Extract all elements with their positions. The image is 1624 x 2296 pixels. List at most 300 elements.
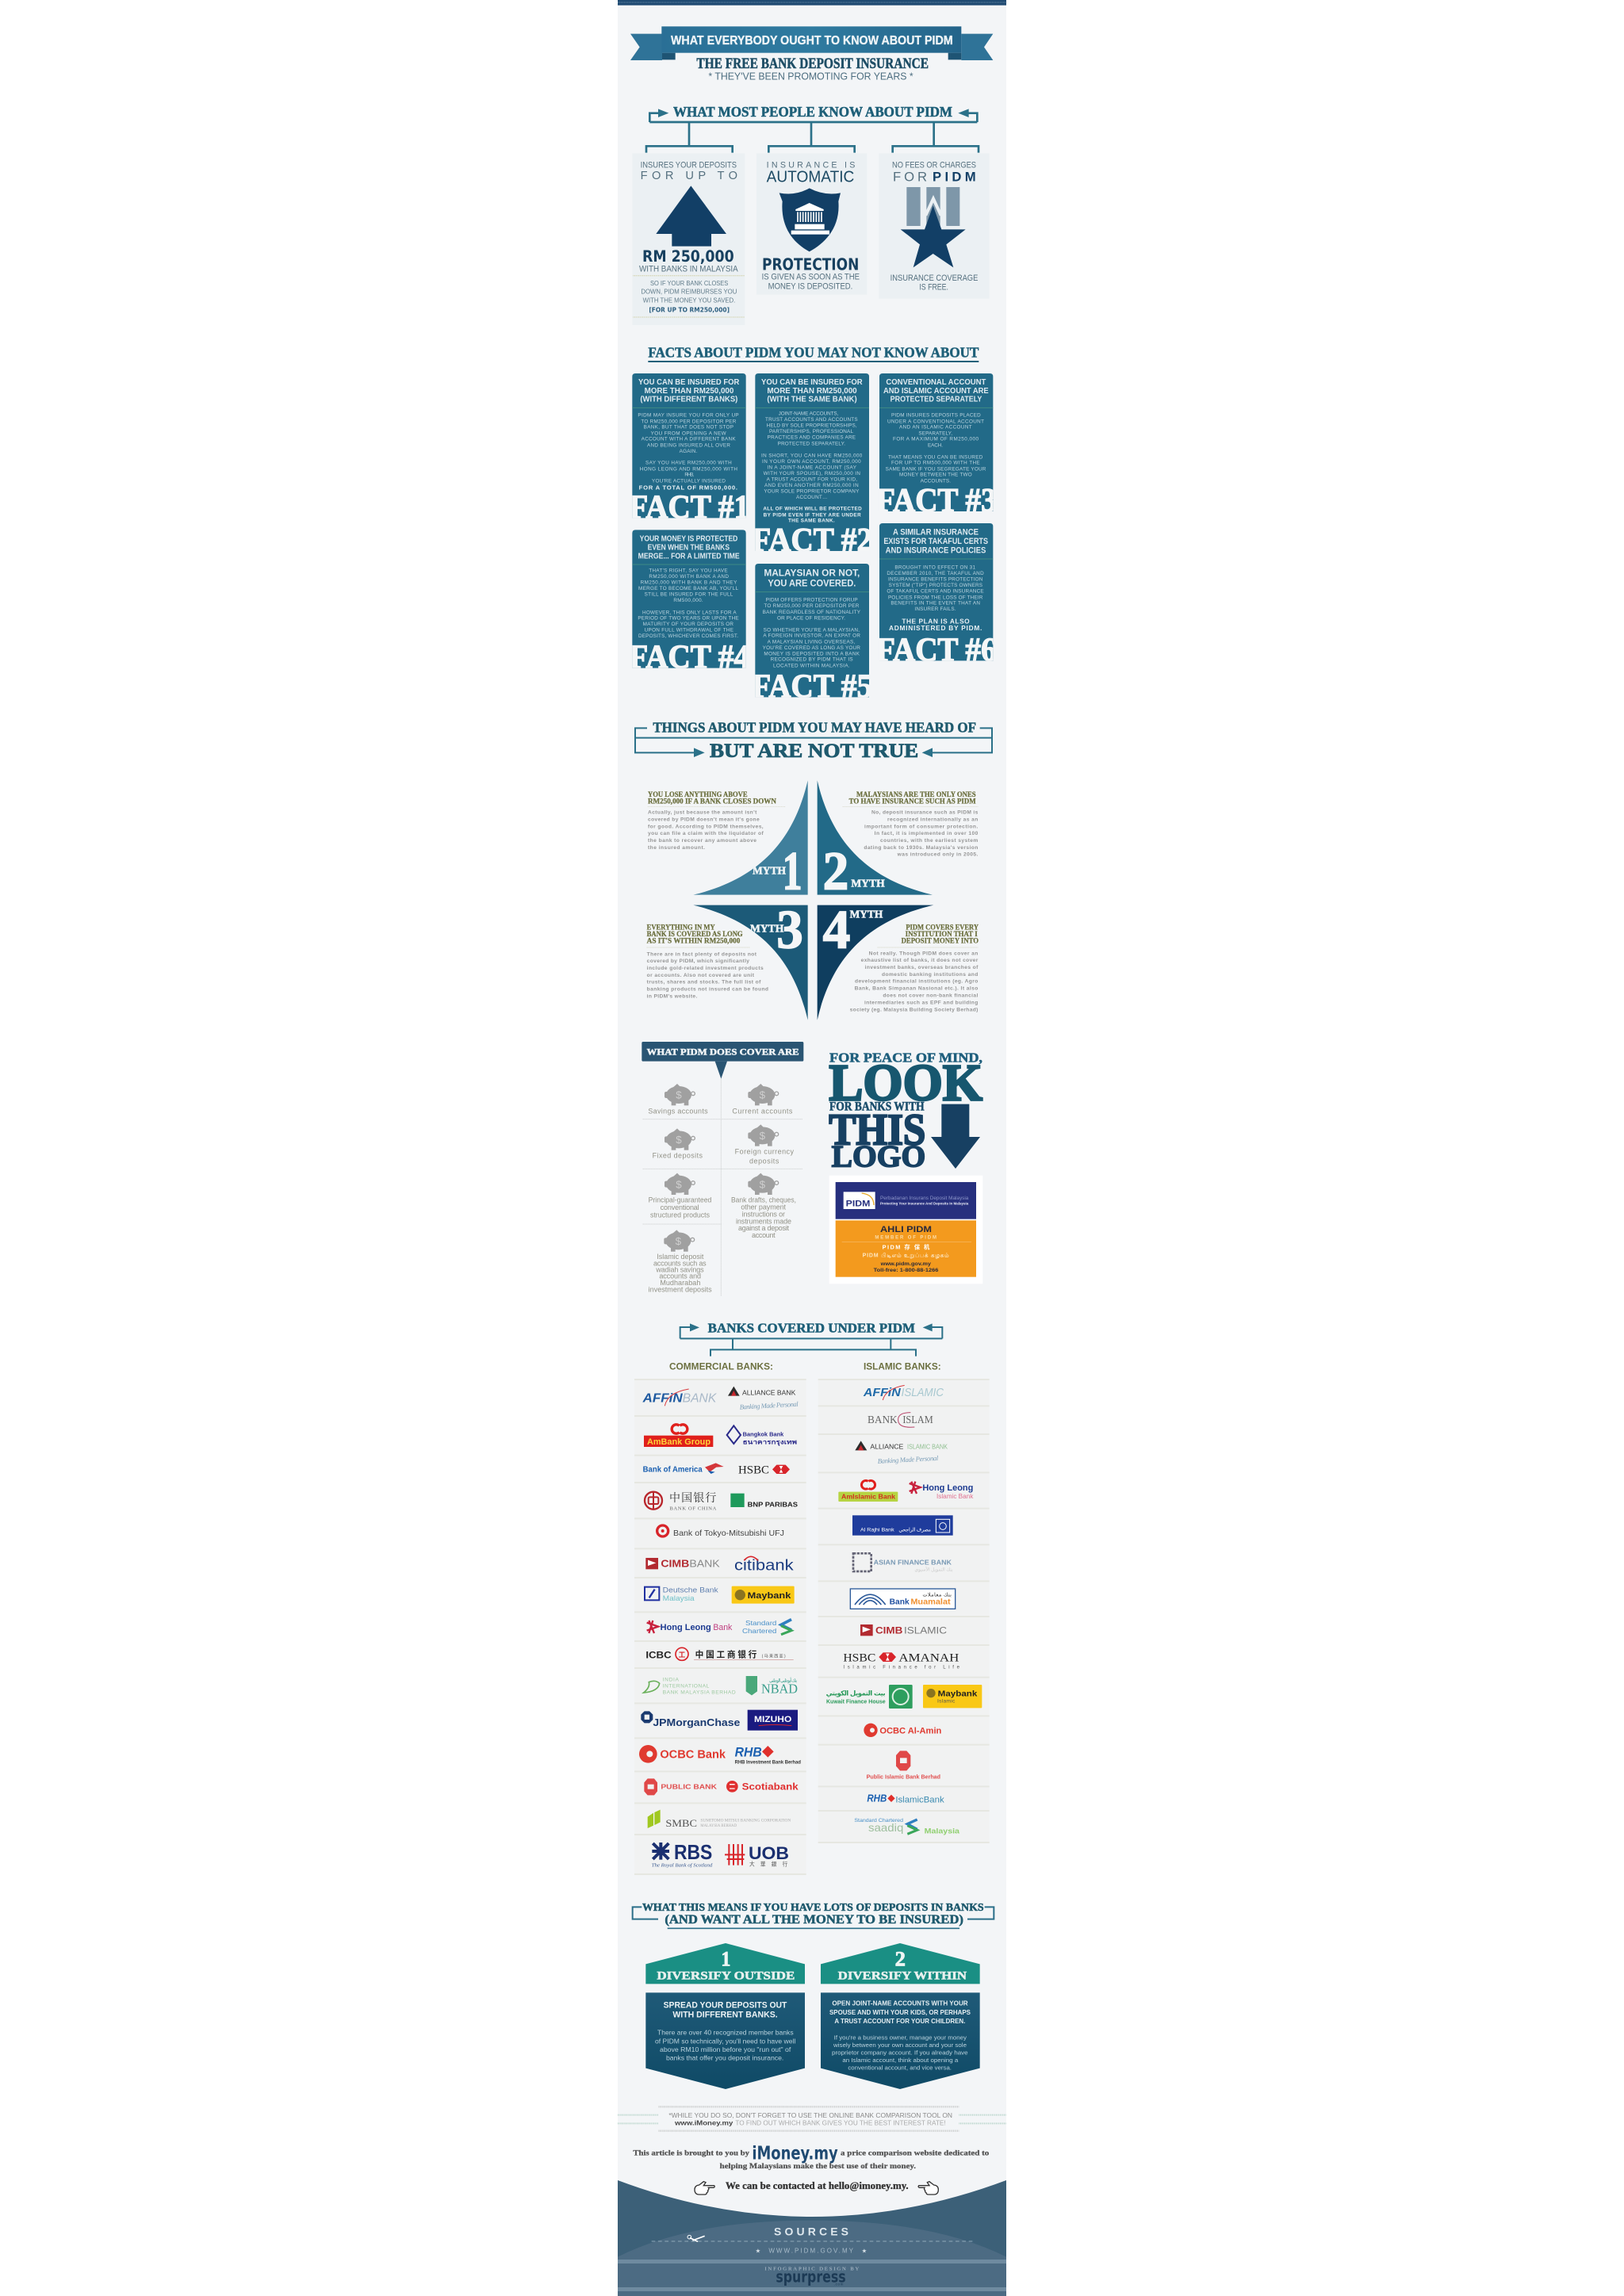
card: fact 6: BENEFITS IN THE EVENT THAT AN (891, 601, 980, 607)
card: fact 6: BROUGHT INTO EFFECT ON 31 (894, 564, 975, 570)
card: fact 5: A FOREIGN INVESTOR, AN EXPAT OR (763, 633, 860, 639)
coverage labels: account (752, 1231, 776, 1239)
sources: ★ (862, 2247, 868, 2254)
card: fact 6: EXISTS FOR TAKAFUL CERTS (883, 537, 988, 546)
design credit: spurpress (776, 2267, 846, 2286)
logo: Al Rajhi Bank: مصرف الراجحي (898, 1528, 931, 1533)
card: fact 3: UNDER A CONVENTIONAL ACCOUNT (887, 419, 984, 424)
card: fact 1: MORE THAN RM250,000 (645, 387, 734, 396)
coverage labels: instructions or (742, 1210, 785, 1218)
card: fact 4: DEPOSITS, WHICHEVER COMES FIRST. (638, 633, 738, 639)
card: fact 6: ADMINISTERED BY PIDM. (889, 624, 982, 632)
card: fact 6: A SIMILAR INSURANCE (893, 527, 979, 537)
card: fact 3: ACCOUNTS. (921, 479, 951, 484)
myth 4 text: PIDM COVERS EVERY (906, 924, 979, 932)
panel: commercial banks background (634, 1379, 806, 1875)
tip 2: diversify within: conventional account, and vice versa. (848, 2064, 952, 2071)
logo: Al Rajhi Bank: Al Rajhi Bank (860, 1528, 895, 1533)
card: fact 5: OR PLACE OF RESIDENCY. (777, 615, 845, 621)
myth 4 text: intermediaries such as EPF and building (864, 1000, 978, 1005)
logo: Standard Chartered Saadiq (854, 1818, 960, 1835)
card: fact 4: RM250,000 WITH BANK B AND THEY (641, 580, 737, 585)
coverage labels (648, 1107, 796, 1293)
card: fact 5: MONEY IS DEPOSITED INTO A BANK (764, 651, 860, 656)
logo: Affin Islamic (863, 1385, 944, 1400)
card: fact 3: PROTECTED SEPARATELY (891, 396, 982, 404)
logo: India International Bank (644, 1677, 736, 1696)
coverage labels: Current accounts (732, 1107, 793, 1115)
myth 1 text (648, 791, 785, 851)
logo: HSBC Amanah: HSBC (843, 1651, 875, 1664)
icon: piggy savings (665, 1084, 695, 1105)
card: fact 2: (WITH THE SAME BANK) (767, 396, 857, 404)
icon: star and bars (901, 187, 966, 267)
coverage labels: wadiah savings (655, 1266, 704, 1274)
heading: what most people know (646, 104, 979, 153)
logo: JPMorgan Chase (641, 1711, 740, 1728)
logo: HSBC Amanah: Islamic Finance for Life (843, 1666, 960, 1670)
tip 1: diversify outside: WITH DIFFERENT BANKS. (672, 2010, 778, 2019)
logo: Standard Chartered Saadiq: saadiq (868, 1821, 903, 1834)
PIDM member logo: Protecting Your Insurance And Deposits In Malaysia (880, 1202, 969, 1206)
panel: automatic protection: AUTOMATIC (767, 167, 854, 186)
logo: Standard Chartered: Standard (745, 1619, 777, 1627)
logo: Maybank (732, 1586, 795, 1604)
card: fact 1: FACT #1 (629, 488, 749, 526)
card: fact 4: THAT'S RIGHT, SAY YOU HAVE (649, 568, 728, 574)
logo: Bank Islam (868, 1413, 933, 1427)
coverage labels: Foreign currency (735, 1148, 794, 1156)
tip 1: diversify outside: There are over 40 recognized member banks (657, 2029, 794, 2037)
icon: piggy fixed: $ (676, 1134, 682, 1146)
logo: Affin Bank (642, 1389, 717, 1406)
card: fact 1: (WITH DIFFERENT BANKS) (640, 396, 737, 404)
myth 3 text: trusts, shares and stocks. The full list of (647, 980, 761, 985)
myth 3 text: include gold-related investment products (647, 966, 764, 971)
logo: CIMB Islamic: CIMB (875, 1625, 903, 1636)
icon: hand left (918, 2182, 938, 2195)
card: fact 2: YOU CAN BE INSURED FOR (761, 378, 863, 387)
card: fact 2: THE SAME BANK. (788, 519, 835, 524)
card: fact 3: FACT #3 (876, 482, 997, 519)
footer wave background (618, 2180, 1006, 2296)
myth 2 text: countries, with the earliest system (880, 838, 978, 844)
card: fact 6: INSURANCE BENEFITS PROTECTION (888, 577, 983, 583)
myth 2 text: MALAYSIANS ARE THE ONLY ONES (856, 791, 976, 799)
callout: look for banks with this logo: THIS (829, 1105, 925, 1154)
tip 2: diversify within: 2 (895, 1946, 906, 1970)
heading: what this means (633, 1901, 994, 1928)
section: banks covered (634, 1321, 990, 1875)
logo: Alliance Islamic Bank (855, 1441, 948, 1465)
card: fact 1: TO RM250,000 PER DEPOSITOR PER (641, 419, 737, 424)
icon: piggy drafts: $ (760, 1178, 766, 1190)
credit: iMoney: a price comparison website dedicated to (841, 2149, 990, 2157)
card: fact 2 (752, 373, 872, 559)
card: fact 1: AGAIN. (680, 449, 698, 454)
logo: CIMB Islamic (860, 1624, 947, 1636)
coverage labels: Principal-guaranteed (649, 1196, 711, 1203)
myth 1 text: YOU LOSE ANYTHING ABOVE (648, 791, 748, 799)
sources: SOURCES (774, 2225, 848, 2237)
card: fact 2: MORE THAN RM250,000 (767, 387, 857, 396)
panel: insures deposits: WITH BANKS IN MALAYSIA (639, 264, 738, 274)
logo: RHB Islamic Bank: RHB (867, 1793, 887, 1804)
logo: NBAD (746, 1676, 798, 1697)
tip 2: diversify within: DIVERSIFY WITHIN (838, 1970, 967, 1983)
PIDM member logo: PIDM 存 保 机 (883, 1243, 930, 1250)
panel: insures deposits: [FOR UP TO RM250,000] (649, 306, 730, 313)
logo: Bangkok Bank (727, 1425, 797, 1446)
myth 3 text (647, 924, 768, 1000)
card: fact 2: FACT #2 (752, 522, 872, 559)
myth 1 text: the bank to recover any amount above (648, 838, 756, 844)
logo: ICBC: (马来西亚) (762, 1652, 786, 1659)
logo: HSBC Amanah: AMANAH (898, 1651, 959, 1664)
tip 2: diversify within: wisely between your own account and your sole (833, 2042, 967, 2049)
logo: AmIslamic Bank: AmIslamic Bank (841, 1494, 896, 1501)
title ribbon: WHAT EVERYBODY OUGHT TO KNOW ABOUT PIDM (671, 34, 953, 48)
tip 1: diversify outside: DIVERSIFY OUTSIDE (657, 1970, 795, 1983)
card: fact 1: YOU'RE ACTUALLY INSURED (652, 478, 726, 484)
logo: Kuwait Finance House: Kuwait Finance House (826, 1700, 886, 1705)
card: fact 1: PIDM MAY INSURE YOU FOR ONLY UP (638, 413, 739, 419)
card: fact 2: IN A JOINT-NAME ACCOUNT (SAY (767, 465, 857, 470)
tip 1: diversify outside (645, 1943, 805, 2089)
logo: India International Bank: INTERNATIONAL (663, 1684, 710, 1689)
tip 1: diversify outside: SPREAD YOUR DEPOSITS OUT (664, 2000, 787, 2010)
icon: down arrow (931, 1104, 980, 1169)
design credit: .com (834, 2282, 844, 2286)
coverage labels: accounts such as (653, 1259, 707, 1267)
coverage labels: Fixed deposits (653, 1152, 703, 1160)
panel: automatic protection: IS GIVEN AS SOON AS THE (762, 273, 860, 282)
subtitle: * THEY'VE BEEN PROMOTING FOR YEARS * (708, 71, 914, 82)
logo: Bank Muamalat (850, 1589, 956, 1609)
myth 2 text: was introduced only in 2005. (897, 852, 978, 858)
logo: Bank of America (643, 1463, 724, 1475)
tip 2: diversify within: SPOUSE AND WITH YOUR KIDS, OR PERHAPS (829, 2008, 971, 2016)
coverage labels: Mudharabah (660, 1279, 700, 1287)
logo: Deutsche Bank: Malaysia (663, 1594, 695, 1602)
logo: RHB Investment Bank: RHB (735, 1745, 762, 1760)
card: fact 4: RM250,000 WITH BANK A AND (649, 574, 729, 580)
logo: Asian Finance Bank: ASIAN FINANCE BANK (874, 1559, 952, 1567)
panel: no fees: FOR (893, 169, 927, 184)
card: fact 4: MERGE TO BECOME BANK AB, YOU'LL (638, 586, 738, 591)
icon: piggy current (748, 1084, 779, 1105)
logo: Affin Islamic: ISLAMIC (902, 1387, 944, 1399)
heading: banks covered (669, 1321, 942, 1372)
myth star graphic: 3 (776, 900, 803, 960)
card: fact 2: A TRUST ACCOUNT FOR YOUR KID, (767, 476, 857, 482)
logo: Bank of China: 中国银行 (669, 1491, 716, 1505)
icon: hand right (695, 2182, 714, 2195)
logo: Hong Leong Islamic (910, 1482, 973, 1500)
tip 1: diversify outside: 1 (721, 1946, 730, 1970)
panel: insures deposits (632, 153, 745, 325)
tip 2: diversify within: an Islamic account, think about opening a (842, 2057, 959, 2064)
logo: Bank Islam: ISLAM (902, 1414, 933, 1425)
logo: CIMB Islamic: ISLAMIC (904, 1625, 947, 1636)
myth 3 text: AS IT'S WITHIN RM250,000 (647, 938, 741, 946)
myth 1 text: covered by PIDM doesn't mean it's gone (648, 817, 760, 822)
card: fact 5: RECOGNIZED BY PIDM THAT IS (771, 657, 853, 663)
myth 4 text: does not cover non-bank financial (883, 993, 978, 998)
PIDM member logo: MEMBER OF PIDM (875, 1236, 936, 1241)
logo: RHB Investment Bank (735, 1745, 801, 1765)
card: fact 2: IN SHORT, YOU CAN HAVE RM250,000 (761, 453, 863, 459)
section: footer (618, 2107, 1006, 2296)
callout heading (642, 1042, 803, 1079)
contact line with pointing hands: We can be contacted at hello@imoney.my. (726, 2180, 909, 2191)
card: fact 3: CONVENTIONAL ACCOUNT (886, 378, 986, 387)
coverage labels: Bank drafts, cheques, (731, 1196, 796, 1203)
logo: SMBC: SUMITOMO MITSUI BANKING CORPORATION (700, 1820, 791, 1823)
myth 2 text (843, 791, 979, 858)
logo: Hong Leong Islamic: Islamic Bank (936, 1493, 973, 1500)
tip 2: diversify within: If you're a business owner, manage your money (834, 2034, 967, 2041)
card: fact 1: RHB, (684, 473, 694, 478)
logo: Bank of China: BANK OF CHINA (669, 1506, 717, 1511)
logo: Alliance Islamic Bank: ISLAMIC BANK (907, 1444, 948, 1451)
card: fact 6: OF TAKAFUL CERTS AND INSURANCE (887, 589, 984, 595)
myth 4 text (850, 924, 979, 1012)
panel: insures deposits: SO IF YOUR BANK CLOSES (650, 279, 729, 287)
heading: facts: FACTS ABOUT PIDM YOU MAY NOT KNOW ABOUT (648, 345, 979, 361)
card: fact 3: AND AN ISLAMIC ACCOUNT (899, 425, 972, 430)
credit: iMoney (633, 2141, 990, 2170)
card: fact 3: AND ISLAMIC ACCOUNT ARE (883, 387, 989, 396)
card: fact 3: FOR A MAXIMUM OF RM250,000 (893, 437, 979, 442)
logo: Alliance Islamic Bank: ALLIANCE (870, 1443, 904, 1451)
panel: automatic protection (756, 153, 867, 295)
logo: RHB Islamic Bank: IslamicBank (895, 1795, 944, 1804)
card: fact 6: AND INSURANCE POLICIES (886, 546, 986, 556)
logo: Hong Leong Islamic: Hong Leong (922, 1483, 973, 1493)
myth star graphic: 1 (783, 841, 802, 901)
logo: Alliance Bank: ALLIANCE BANK (742, 1388, 796, 1396)
heading: what this means: WHAT THIS MEANS IF YOU HAVE LOTS OF DEPOSITS IN BANKS (642, 1901, 984, 1913)
design credit: INFOGRAPHIC DESIGN BY (764, 2266, 860, 2271)
heading: banks covered: COMMERCIAL BANKS: (669, 1360, 773, 1372)
PIDM member logo: Toll-free: 1-800-88-1266 (874, 1268, 939, 1273)
card: fact 5: BANK REGARDLESS OF NATIONALITY (763, 610, 861, 615)
card: fact 6: FACT #6 (876, 631, 997, 668)
logo: RHB Investment Bank: RHB Investment Bank Berhad (735, 1760, 801, 1765)
PIDM member logo: Perbadanan Insurans Deposit Malaysia (880, 1196, 969, 1201)
top bar (618, 0, 1006, 6)
panel: insures deposits: INSURES YOUR DEPOSITS (641, 161, 737, 170)
card: fact 4: MATURITY OF YOUR DEPOSITS OR (643, 622, 733, 627)
card: fact 6: POLICIES FROM THE LOSS OF THEIR (888, 595, 983, 600)
myth 3 text: covered by PIDM, which significantly (647, 959, 749, 964)
sources (652, 2225, 973, 2254)
logo: OCBC Bank: OCBC Bank (660, 1748, 726, 1761)
contact line with pointing hands (695, 2180, 938, 2195)
myth star graphic: MYTH (850, 909, 883, 920)
card: fact 5: A MALAYSIAN LIVING OVERSEAS, (768, 639, 856, 645)
card: fact 4: MERGE... FOR A LIMITED TIME (638, 552, 740, 561)
coverage labels: structured products (650, 1211, 710, 1219)
logo: Alliance Bank: Banking Made Personal (739, 1400, 799, 1411)
callout: look for banks with this logo: LOOK (829, 1054, 982, 1112)
PIDM member logo: PIDM பிடிஎம் உறுப்பக் கழகம் (863, 1253, 949, 1259)
panel: no fees: PIDM (933, 169, 976, 184)
myth 3 text: or accounts. Also not covered are unit (647, 973, 755, 978)
card: fact 1: AND BEING INSURED ALL OVER (647, 442, 730, 448)
logo: Bank of China (645, 1491, 717, 1511)
icon: piggy fixed (665, 1128, 695, 1150)
PIDM member logo: www.pidm.gov.my (880, 1261, 932, 1267)
icon: piggy foreign (748, 1124, 779, 1146)
card: fact 6 (879, 523, 993, 661)
credit: iMoney: iMoney.my (752, 2141, 838, 2164)
tip 2: diversify within: proprietor company account. If you already have (832, 2049, 968, 2057)
icon: piggy islamic: $ (676, 1235, 682, 1247)
section: what this means (633, 1901, 994, 2089)
logo: CIMB Bank (645, 1558, 720, 1570)
card: fact 1 (629, 373, 749, 526)
myth star graphic: MYTH (750, 923, 784, 935)
logo: JPMorgan Chase: JPMorganChase (653, 1716, 740, 1728)
logo: Bank of Tokyo-Mitsubishi UFJ (657, 1525, 784, 1538)
logo: ICBC: 工 (679, 1651, 686, 1659)
logo: Bank Muamalat: Bank (890, 1598, 910, 1606)
logo: Bank Muamalat: Muamalat (910, 1598, 951, 1606)
myth 2 text: TO HAVE INSURANCE SUCH AS PIDM (849, 798, 976, 806)
card: fact 4: HOWEVER, THIS ONLY LASTS FOR A (642, 610, 737, 615)
logo: India International Bank: INDIA (663, 1677, 680, 1682)
logo: Deutsche Bank (645, 1586, 718, 1602)
logo: ICBC (645, 1647, 794, 1660)
myth 4 text: development financial institutions (eg. Agro (855, 979, 978, 985)
panel: insures deposits: DOWN, PIDM REIMBURSES YOU (641, 288, 737, 296)
logo: RHB Islamic Bank (867, 1793, 944, 1804)
infographic background panel (618, 0, 1006, 2296)
myth 4 text: Bank, Bank Simpanan Nasional etc.). It also (855, 986, 978, 992)
logo: Asian Finance Bank: بنك التمويل الآسيوي (914, 1567, 953, 1573)
callout: look for banks with this logo (829, 1050, 982, 1174)
heading: what most people know: WHAT MOST PEOPLE KNOW ABOUT PIDM (673, 104, 952, 120)
heading: banks covered: ISLAMIC BANKS: (864, 1360, 941, 1372)
myth 2 text: In fact, it is implemented in over 100 (875, 831, 979, 836)
panel: insures deposits: WITH THE MONEY YOU SAVED. (643, 297, 735, 304)
logo: AmBank Group: AmBank Group (647, 1437, 710, 1447)
myth 3 text: EVERYTHING IN MY (647, 924, 715, 932)
PIDM member logo: AHLI PIDM (880, 1225, 932, 1234)
card: fact 3: SEPARATELY, (918, 430, 952, 436)
panel: no fees: IS FREE. (919, 283, 948, 293)
panel: insures deposits: RM 250,000 (642, 247, 734, 266)
panel: no fees: NO FEES OR CHARGES (892, 161, 976, 170)
credit: iMoney: This article is brought to you by (633, 2149, 750, 2157)
logo: Bank Islam: BANK (868, 1414, 898, 1425)
logo: AmBank Group (644, 1425, 713, 1447)
myth 1 text: Actually, just because the amount isn't (648, 810, 757, 816)
coverage labels: investment deposits (649, 1285, 712, 1293)
logo: SMBC: MALAYSIA BERHAD (700, 1824, 737, 1828)
myth 1 text: the insured amount. (648, 845, 705, 851)
card: fact 1: YOU FROM OPENING A NEW (651, 430, 726, 436)
myth 4 text: exhaustive list of banks, it does not cover (861, 958, 979, 963)
icon: piggy current: $ (760, 1089, 766, 1101)
tip 1: diversify outside: banks that offer you deposit insurance. (666, 2054, 783, 2062)
note: comparison tool: *WHILE YOU DO SO, DON'T FORGET TO USE THE ONLINE BANK COMPARISON TOOL ON (668, 2111, 952, 2119)
logo: Kuwait Finance House: بيت التمويل الكويتي (826, 1689, 886, 1697)
card: fact 2: HELD BY SOLE PROPRIETORSHIPS, (767, 423, 857, 429)
card: fact 1: FOR A TOTAL OF RM500,000. (639, 484, 737, 491)
logo: Public Bank: PUBLIC BANK (661, 1784, 717, 1791)
note: comparison tool (618, 2107, 1006, 2131)
coverage labels: Savings accounts (648, 1107, 708, 1115)
panel: insures deposits: FOR UP TO (641, 170, 737, 182)
card: fact 3 (879, 373, 993, 511)
myth 4 text: INSTITUTION THAT I (906, 931, 978, 939)
card: fact 4: STILL BE INSURED FOR THE FULL (645, 592, 733, 598)
card: fact 4: YOUR MONEY IS PROTECTED (640, 535, 737, 544)
coverage labels: Islamic deposit (657, 1253, 704, 1261)
logo: Maybank Islamic: Maybank (938, 1689, 978, 1698)
heading: what this means: (AND WANT ALL THE MONEY TO BE INSURED) (665, 1913, 963, 1927)
myth 4 text: Not really. Though PIDM does cover an (869, 951, 978, 956)
card: fact 5 (755, 564, 869, 698)
icon: piggy islamic (664, 1230, 695, 1252)
panel: what PIDM does cover (642, 1042, 803, 1296)
logo: OCBC Bank (639, 1745, 726, 1763)
logo: Standard Chartered (742, 1619, 791, 1635)
heading: things you may have heard: BUT ARE NOT TRUE (710, 740, 918, 762)
card: fact 3: PIDM INSURES DEPOSITS PLACED (891, 413, 981, 419)
callout heading: WHAT PIDM DOES COVER ARE (647, 1047, 799, 1058)
logo: Kuwait Finance House (826, 1685, 913, 1709)
logo: NBAD: NBAD (761, 1682, 798, 1697)
icon: piggy drafts (748, 1173, 779, 1195)
card: fact 2: JOINT-NAME ACCOUNTS, (779, 411, 839, 416)
coverage labels: accounts and (659, 1272, 701, 1280)
logo: Hong Leong Bank (647, 1621, 733, 1633)
logo: ICBC: ICBC (645, 1649, 672, 1660)
card: fact 3: EACH. (928, 442, 943, 448)
logo: Hong Leong Bank: Hong Leong (661, 1623, 711, 1632)
myth 4 text: society (eg. Malaysia Building Society Berhad) (850, 1007, 978, 1012)
card: fact 2: TRUST ACCOUNTS AND ACCOUNTS (765, 417, 858, 423)
card: fact 2: ACCOUNT… (796, 495, 827, 500)
card: fact 4: FACT #4 (629, 639, 749, 676)
logo: Maybank: Maybank (748, 1591, 791, 1601)
card: fact 3: MONEY BETWEEN THE TWO (899, 473, 972, 478)
credit: iMoney: helping Malaysians make the best use of their money. (720, 2162, 916, 2170)
logo: UOB: 大華銀行 (749, 1860, 788, 1867)
heading: banks covered: BANKS COVERED UNDER PIDM (708, 1321, 915, 1336)
card: fact 5: YOU'RE COVERED AS LONG AS YOUR (763, 645, 860, 651)
logo: Bangkok Bank: Bangkok Bank (743, 1430, 784, 1437)
icon: piggy principal (665, 1173, 695, 1195)
subtitle: THE FREE BANK DEPOSIT INSURANCE (696, 55, 929, 72)
card: fact 3: FOR UP TO RM500,000 WITH THE (891, 461, 980, 466)
logo: Standard Chartered Saadiq: Malaysia (925, 1827, 960, 1835)
logo: RBS: The Royal Bank of Scotland (652, 1862, 713, 1868)
panel: no fees: INSURANCE COVERAGE (891, 274, 978, 283)
panel: automatic protection: MONEY IS DEPOSITED. (768, 281, 852, 291)
logo: BNP Paribas (730, 1494, 798, 1509)
logo: Public Islamic Bank: Public Islamic Bank Berhad (867, 1774, 940, 1780)
logo: Mizuho (748, 1710, 798, 1731)
logo: OCBC Al-Amin: OCBC Al-Amin (879, 1726, 941, 1735)
logo: Standard Chartered Saadiq: Standard Chartered (854, 1818, 903, 1823)
card: fact 5: PIDM OFFERS PROTECTION FORUP (766, 597, 858, 603)
icon: piggy savings: $ (676, 1089, 682, 1101)
